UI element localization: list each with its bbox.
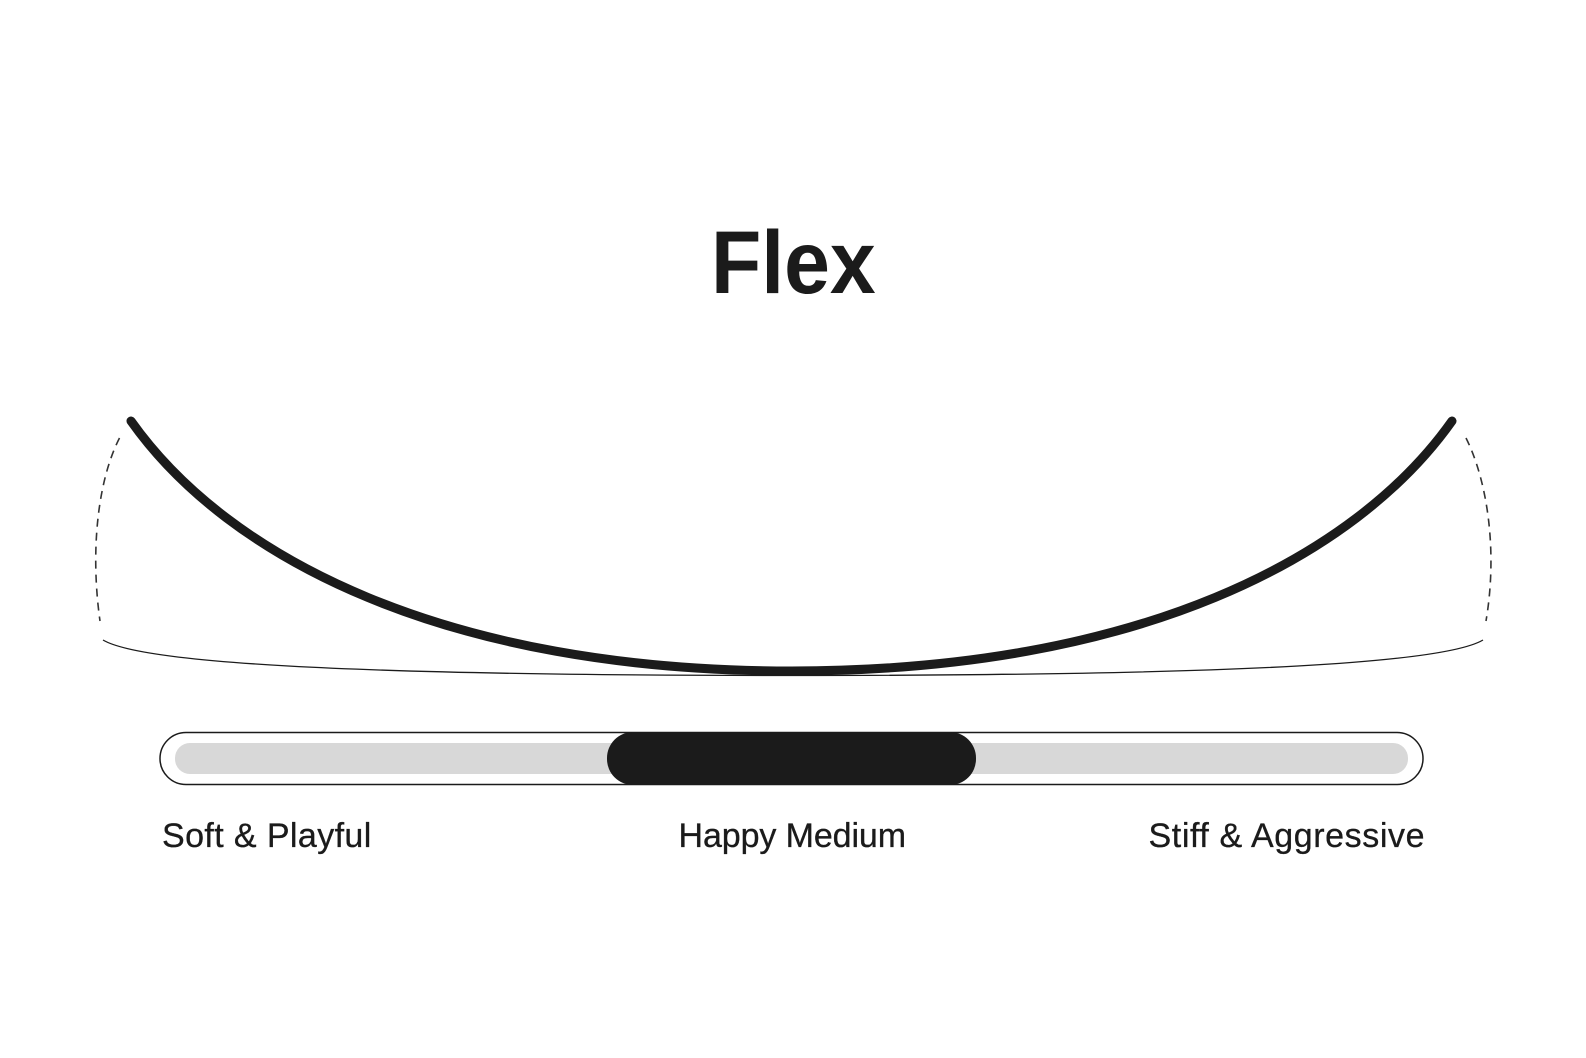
- right dashed motion arc: [1466, 438, 1491, 621]
- scale labels: [162, 817, 1425, 855]
- flex scale bar: [160, 732, 1423, 785]
- board flex illustration: [96, 421, 1491, 676]
- unflexed board baseline: [103, 640, 1483, 676]
- left dashed motion arc: [96, 438, 120, 621]
- bar outline: [160, 732, 1423, 784]
- label: soft: Soft & Playful: [162, 817, 372, 855]
- title: Flex: [711, 213, 876, 313]
- flexed board curve: [131, 421, 1452, 671]
- label: medium: Happy Medium: [678, 817, 906, 855]
- label: stiff: Stiff & Aggressive: [1148, 817, 1425, 855]
- bar grey track: [175, 743, 1408, 774]
- bar active range: [607, 732, 976, 785]
